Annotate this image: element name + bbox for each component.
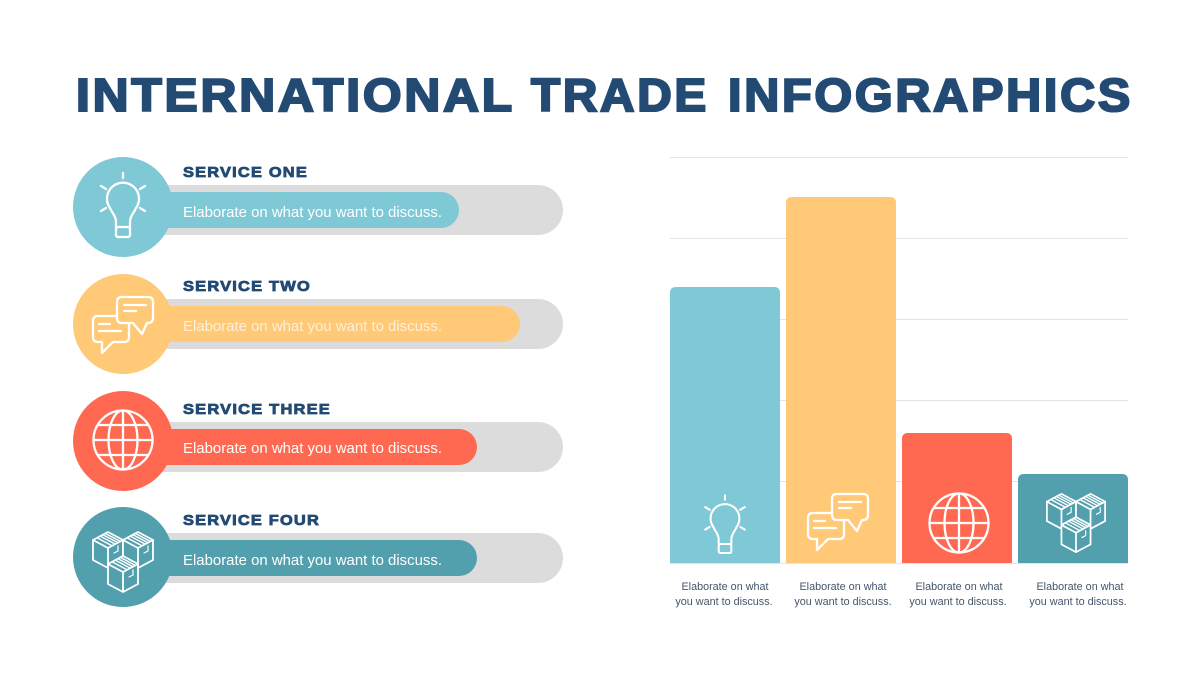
bar four — [1018, 474, 1128, 563]
caption four: Elaborate on what — [1036, 581, 1124, 593]
title: INFOGRAPHICS — [728, 69, 1133, 121]
caption two: Elaborate on what — [799, 581, 887, 593]
bar three — [902, 433, 1012, 563]
service one row — [73, 157, 563, 257]
service four row — [73, 507, 563, 607]
caption three: you want to discuss. — [909, 596, 1007, 608]
caption four: you want to discuss. — [1029, 596, 1127, 608]
caption one: Elaborate on what — [681, 581, 769, 593]
title — [76, 69, 1133, 121]
service four row: SERVICE FOUR — [183, 512, 320, 529]
bar two — [786, 197, 896, 563]
bar one — [670, 287, 780, 563]
bar chart — [670, 158, 1128, 608]
service two row: SERVICE TWO — [183, 278, 311, 295]
service one row: Elaborate on what you want to discuss. — [183, 204, 442, 221]
service three row: SERVICE THREE — [183, 401, 331, 418]
service four row: Elaborate on what you want to discuss. — [183, 552, 442, 569]
service two row — [73, 274, 563, 374]
service three row — [73, 391, 563, 491]
service one row: SERVICE ONE — [183, 164, 308, 181]
service two row: Elaborate on what you want to discuss. — [183, 318, 442, 335]
caption three: Elaborate on what — [915, 581, 1003, 593]
title: TRADE — [531, 69, 709, 121]
service three row: Elaborate on what you want to discuss. — [183, 440, 442, 457]
caption one: you want to discuss. — [675, 596, 773, 608]
panel: services list — [73, 157, 563, 607]
caption two: you want to discuss. — [794, 596, 892, 608]
title: INTERNATIONAL — [76, 69, 515, 121]
